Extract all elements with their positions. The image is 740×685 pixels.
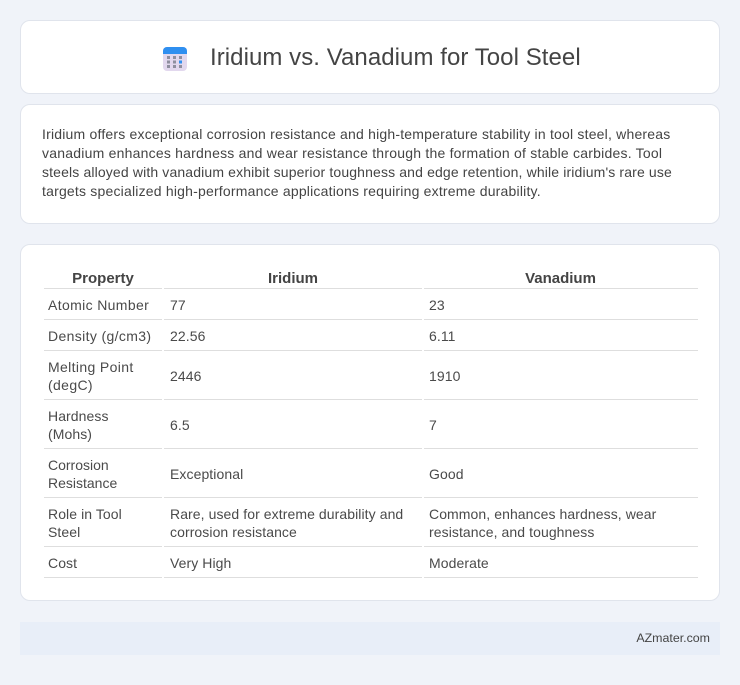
- row: corrosion resistance: Resistance: [48, 475, 117, 491]
- table header: Vanadium: [525, 270, 596, 287]
- row: melting point: 1910: [429, 368, 460, 384]
- row: corrosion resistance: Good: [429, 466, 464, 482]
- row: cost: Cost: [48, 555, 77, 571]
- row: atomic number: 23: [429, 297, 445, 313]
- row: density: [48, 328, 456, 344]
- row: hardness: [48, 408, 437, 442]
- row: corrosion resistance: Exceptional: [170, 466, 243, 482]
- row: hardness: Hardness: [48, 408, 109, 424]
- row: atomic number: [48, 297, 445, 313]
- panel: comparison table: [20, 244, 720, 601]
- table header: Iridium: [268, 270, 318, 287]
- row: melting point: (degC): [48, 377, 93, 393]
- table header: Property: [72, 270, 134, 287]
- row: role in tool steel: Role in Tool: [48, 506, 122, 522]
- row: cost: Very High: [170, 555, 231, 571]
- row: corrosion resistance: Corrosion: [48, 457, 109, 473]
- row: melting point: Melting Point: [48, 359, 134, 375]
- row: role in tool steel: Steel: [48, 524, 80, 540]
- row: role in tool steel: Common, enhances hardness, wear: [429, 506, 656, 522]
- row: density: 6.11: [429, 328, 456, 344]
- row: cost: Moderate: [429, 555, 489, 571]
- row: cost: [48, 555, 489, 571]
- panel: title: [20, 20, 720, 94]
- panel: introduction text: [20, 104, 720, 224]
- row: role in tool steel: Rare, used for extreme durability and: [170, 506, 403, 522]
- panel: introduction text: steels alloyed with vanadium exhibit superior toughness and edge retention, while iridium's rare use: [42, 164, 672, 180]
- row: role in tool steel: resistance, and toughness: [429, 524, 594, 540]
- panel: introduction text: Iridium offers exceptional corrosion resistance and high-temperature stability in tool steel, whereas: [42, 126, 670, 142]
- row: hardness: 7: [429, 417, 437, 433]
- row: role in tool steel: [48, 506, 656, 540]
- row: melting point: 2446: [170, 368, 201, 384]
- row: melting point: [48, 359, 460, 393]
- row: corrosion resistance: [48, 457, 464, 491]
- row: density: 22.56: [170, 328, 205, 344]
- footer: [20, 622, 720, 655]
- panel: introduction text: targets specialized high-performance applications requiring extreme durability.: [42, 183, 541, 199]
- heading: Iridium vs. Vanadium for Tool Steel: [210, 44, 581, 71]
- row: hardness: (Mohs): [48, 426, 92, 442]
- row: atomic number: Atomic Number: [48, 297, 149, 313]
- panel: introduction text: vanadium enhances hardness and wear resistance through the formation of stable carbides. Tool: [42, 145, 662, 161]
- row: hardness: 6.5: [170, 417, 190, 433]
- table header: [72, 270, 596, 287]
- footer credit: AZmater.com: [636, 631, 710, 645]
- row: density: Density (g/cm3): [48, 328, 151, 344]
- icon: calendar: [163, 47, 187, 71]
- row: atomic number: 77: [170, 297, 186, 313]
- row: role in tool steel: corrosion resistance: [170, 524, 297, 540]
